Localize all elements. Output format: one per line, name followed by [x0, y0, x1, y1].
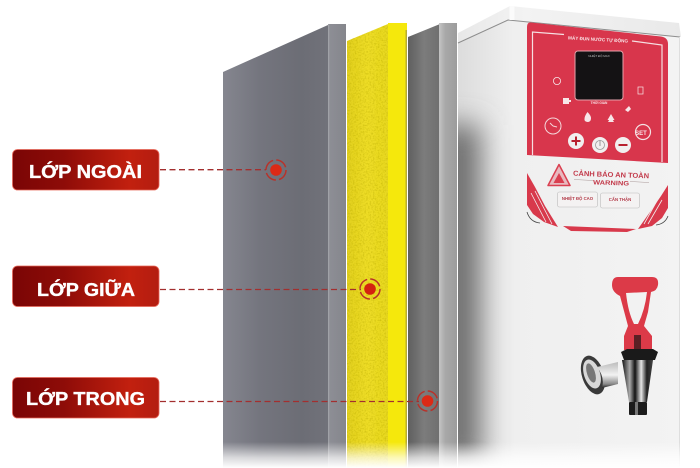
power button [592, 137, 608, 153]
warning box: caution [600, 193, 640, 208]
red corner decoration left [527, 173, 558, 227]
layer: inner panel [408, 23, 457, 468]
display screen: NHIỆT ĐỘ MAX [588, 53, 610, 58]
label: inner layer [12, 378, 159, 418]
minus button [615, 137, 631, 153]
red bottom bar [563, 226, 636, 232]
label: outer layer [12, 150, 159, 190]
label: middle layer: LỚP GIỮA [37, 279, 135, 300]
set button [635, 124, 650, 140]
plus button [568, 133, 584, 149]
machine lid [458, 6, 681, 43]
label: middle layer [12, 266, 159, 306]
faucet chrome body [621, 335, 658, 415]
display caption: THỜI GIAN [591, 100, 608, 105]
panel frame [532, 32, 662, 162]
target marker: middle layer [360, 279, 380, 299]
target marker: outer layer [266, 160, 286, 180]
display screen [575, 51, 623, 100]
warning box: high temperature [558, 192, 598, 207]
bottom fade [215, 442, 685, 468]
target marker: inner layer [418, 391, 438, 411]
faucet wall mount [576, 353, 618, 397]
set button: SET [635, 131, 647, 137]
warning subtitle [574, 179, 649, 188]
machine front face [458, 19, 680, 468]
machine body [436, 6, 681, 468]
clock button [545, 118, 561, 134]
warning box: high temperature: NHIỆT ĐỘ CAO [562, 196, 594, 201]
warning triangle icon [548, 164, 570, 186]
dashed leader lines [160, 170, 419, 402]
faucet red handle [612, 277, 658, 350]
warning box: caution: CẨN THẬN [609, 197, 631, 202]
panel: red control area [527, 22, 668, 163]
faucet [576, 277, 658, 415]
panel title: MÁY ĐUN NƯỚC TỰ ĐỘNG [568, 33, 629, 44]
layer: outer panel [223, 24, 346, 468]
warning subtitle: WARNING [593, 179, 629, 188]
layer: yellow foam [347, 23, 407, 468]
machine left shadow [436, 125, 480, 465]
warning title: CẢNH BÁO AN TOÀN [573, 169, 649, 180]
small indicator icons [553, 77, 643, 122]
label: inner layer: LỚP TRONG [26, 388, 145, 409]
control panel [527, 22, 668, 232]
label: outer layer: LỚP NGOÀI [29, 161, 142, 182]
red corner decoration right [638, 185, 668, 229]
